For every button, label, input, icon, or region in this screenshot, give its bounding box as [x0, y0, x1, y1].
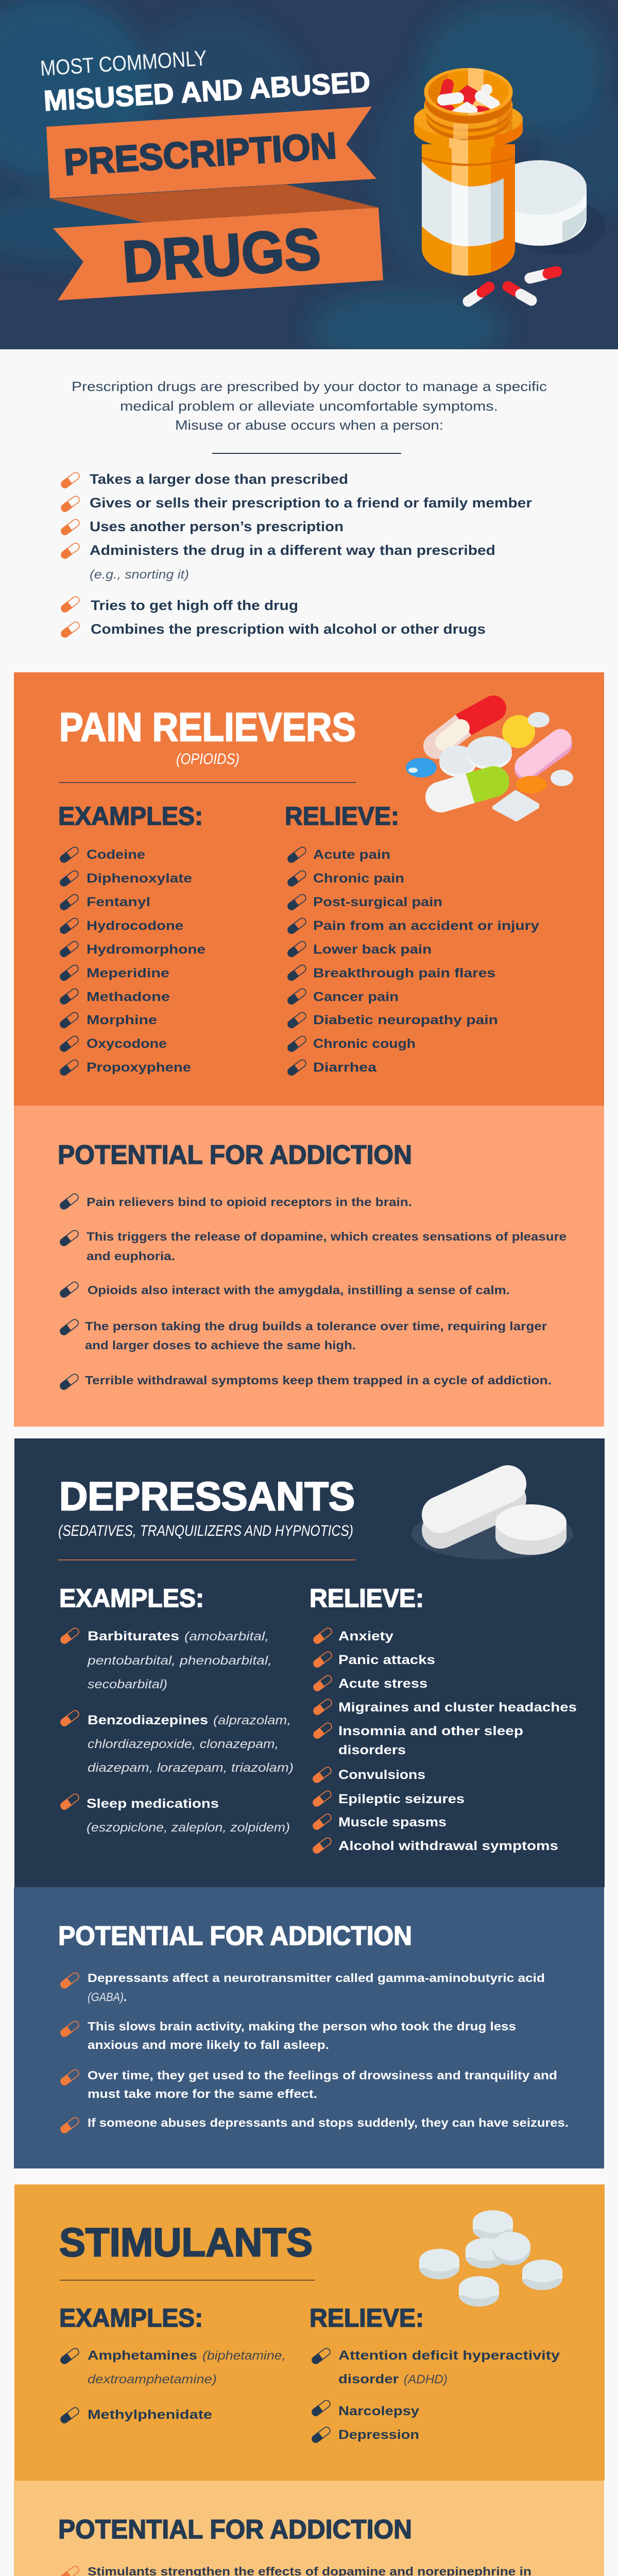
- list item: adhd: disorder: [338, 2372, 399, 2386]
- illustration: white bottle cap: [515, 160, 605, 255]
- heading: examples: EXAMPLES:: [58, 802, 203, 831]
- panel: depressants addiction: [14, 1887, 604, 2168]
- list: misuse behaviours: [59, 471, 533, 639]
- illustration: orange pill bottle: [414, 64, 523, 283]
- list: depressant addiction points: .: [124, 1990, 127, 2004]
- list item: larger dose: Takes a larger dose than prescribed: [90, 471, 348, 487]
- list: opioid addiction points: Opioids also interact with the amygdala, instilling a sense of calm.: [88, 1283, 510, 1297]
- list item: amphetamines: (biphetamine,: [202, 2349, 286, 2363]
- subheading: sedatives: (SEDATIVES, TRANQUILIZERS AND HYPNOTICS): [58, 1522, 353, 1539]
- pills inside the bottle: [441, 84, 494, 116]
- list: depressant addiction points: must take more for the same effect.: [88, 2087, 317, 2100]
- illustration: round tablets: [419, 2210, 562, 2307]
- list item: barbiturates: (amobarbital,: [184, 1630, 269, 1643]
- list: opioid uses: Breakthrough pain flares: [313, 966, 495, 980]
- list: depressant addiction points: This slows brain activity, making the person who took the drug less: [88, 2020, 516, 2033]
- list: opioid examples: Methadone: [87, 990, 170, 1004]
- list item: barbiturates: Barbiturates: [88, 1629, 179, 1643]
- list: opioid examples: Hydromorphone: [87, 942, 205, 957]
- illustration: white tablets: [411, 1484, 573, 1560]
- illustration: assorted pills: [406, 708, 573, 822]
- intro paragraph: [72, 379, 547, 433]
- list: opioid addiction points: and euphoria.: [87, 1249, 175, 1263]
- list: depressant addiction points: (GABA): [88, 1990, 124, 2004]
- list: stimulant examples: [59, 2347, 286, 2425]
- list item: adhd: Attention deficit hyperactivity: [338, 2348, 560, 2363]
- list: opioid examples: Morphine: [87, 1013, 157, 1027]
- list item: sleep medications: Sleep medications: [87, 1797, 219, 1811]
- list: opioid uses: Chronic cough: [313, 1037, 416, 1051]
- list item: administers differently: Administers the drug in a different way than prescribed: [90, 543, 495, 558]
- list: opioid addiction points: Pain relievers bind to opioid receptors in the brain.: [87, 1195, 412, 1209]
- list: opioid uses: Diarrhea: [313, 1060, 377, 1075]
- panel: pain relievers addiction: [14, 1106, 604, 1427]
- title word: prescription: PRESCRIPTION: [63, 125, 338, 183]
- list: depressant uses: Epileptic seizures: [338, 1792, 465, 1806]
- intro paragraph: Prescription drugs are prescribed by your doctor to manage a specific: [72, 379, 547, 394]
- intro paragraph: medical problem or alleviate uncomfortable symptoms.: [120, 398, 498, 414]
- list: depressant uses: Acute stress: [338, 1676, 427, 1691]
- list: opioid uses: Diabetic neuropathy pain: [313, 1013, 498, 1027]
- heading: potential for addiction: POTENTIAL FOR ADDICTION: [58, 2515, 412, 2545]
- list: depressant addiction points: [59, 1971, 569, 2135]
- heading: depressants: DEPRESSANTS: [59, 1473, 355, 1519]
- list: depressant uses: Insomnia and other sleep: [338, 1724, 523, 1738]
- list item: methylphenidate: Methylphenidate: [88, 2408, 212, 2422]
- heading: examples: EXAMPLES:: [59, 1584, 204, 1613]
- list item: adhd: [310, 2347, 560, 2386]
- list: depressant examples: [59, 1626, 294, 1835]
- list item: administers differently: (e.g., snorting it): [90, 568, 189, 582]
- list: opioid uses: Lower back pain: [313, 942, 432, 957]
- panel: pain relievers: [14, 672, 604, 1106]
- list item: barbiturates: [59, 1626, 272, 1691]
- panel: depressants: [14, 1438, 605, 1887]
- hero background: [0, 0, 618, 371]
- list: depressant uses: Alcohol withdrawal symptoms: [338, 1839, 558, 1853]
- list: opioid uses: Acute pain: [313, 848, 390, 862]
- list item: amphetamines: dextroamphetamine): [88, 2372, 217, 2386]
- list: depressant uses: [311, 1626, 577, 1855]
- panel: stimulants: [14, 2184, 605, 2481]
- list: opioid examples: Codeine: [87, 848, 145, 862]
- list: stimulant uses: [310, 2347, 560, 2445]
- list item: barbiturates: secobarbital): [88, 1677, 167, 1691]
- list item: tries to get high: Tries to get high off the drug: [91, 598, 298, 613]
- list: opioid examples: Meperidine: [87, 966, 169, 980]
- list: depressant addiction points: Over time, they get used to the feelings of drowsiness and tranquility and: [88, 2069, 557, 2082]
- list: opioid addiction points: and larger doses to achieve the same high.: [85, 1338, 356, 1352]
- list item: larger dose: [59, 471, 348, 490]
- list item: another person's prescription: Uses another person’s prescription: [90, 519, 344, 534]
- list: opioid uses: Pain from an accident or injury: [313, 919, 539, 933]
- list item: narcolepsy: Narcolepsy: [338, 2404, 419, 2418]
- list: depressant addiction points: If someone abuses depressants and stops suddenly, they can have seizures.: [88, 2116, 569, 2129]
- list item: depression: [310, 2426, 419, 2445]
- list: opioid examples: Fentanyl: [87, 895, 150, 909]
- list item: depression: Depression: [338, 2428, 419, 2442]
- list item: tries to get high: [59, 595, 298, 614]
- title line: most commonly: MOST COMMONLY: [40, 46, 208, 80]
- list item: sleep medications: [59, 1792, 290, 1835]
- list item: sleep medications: (eszopiclone, zaleplon, zolpidem): [87, 1821, 290, 1835]
- list: depressant uses: Panic attacks: [338, 1653, 435, 1667]
- list item: gives or sells: Gives or sells their prescription to a friend or family member: [90, 495, 533, 511]
- heading: relieve: RELIEVE:: [310, 1584, 424, 1613]
- ribbon: prescription drugs banner: [46, 107, 383, 300]
- list item: combines with alcohol: Combines the prescription with alcohol or other drugs: [91, 621, 486, 637]
- panel: hero header: [0, 0, 618, 371]
- bottle opening: [424, 68, 513, 116]
- bottle neck threads: [424, 98, 513, 140]
- bottle collar: [414, 108, 523, 149]
- list: depressant addiction points: anxious and more likely to fall asleep.: [88, 2038, 329, 2052]
- list: opioid uses: Chronic pain: [313, 871, 404, 886]
- list: depressant uses: Anxiety: [338, 1629, 393, 1643]
- list: depressant uses: Convulsions: [338, 1768, 425, 1782]
- list item: benzodiazepines: [59, 1709, 294, 1775]
- list: depressant uses: Migraines and cluster headaches: [338, 1700, 577, 1715]
- list: opioid examples: [58, 845, 205, 1077]
- list item: benzodiazepines: chlordiazepoxide, clonazepam,: [88, 1737, 279, 1751]
- list item: amphetamines: Amphetamines: [88, 2348, 197, 2363]
- list item: benzodiazepines: Benzodiazepines: [88, 1713, 208, 1727]
- list: depressant uses: Muscle spasms: [338, 1815, 447, 1829]
- heading: potential for addiction: POTENTIAL FOR ADDICTION: [58, 1140, 412, 1170]
- list: opioid addiction points: This triggers the release of dopamine, which creates sensations of pleasure: [87, 1230, 566, 1243]
- list item: barbiturates: pentobarbital, phenobarbital,: [87, 1654, 272, 1668]
- list item: benzodiazepines: (alprazolam,: [213, 1714, 291, 1727]
- list: opioid examples: Diphenoxylate: [87, 871, 192, 886]
- intro paragraph: Misuse or abuse occurs when a person:: [175, 417, 443, 433]
- list: opioid addiction points: The person taking the drug builds a tolerance over time, requiring larger: [85, 1319, 547, 1333]
- list item: narcolepsy: [310, 2399, 419, 2418]
- list item: combines with alcohol: [59, 620, 486, 639]
- title word: drugs: DRUGS: [121, 216, 323, 295]
- list item: gives or sells: [59, 495, 533, 514]
- list item: benzodiazepines: diazepam, lorazepam, triazolam): [88, 1761, 294, 1775]
- heading: examples: EXAMPLES:: [59, 2303, 203, 2332]
- subheading: opioids: (OPIOIDS): [176, 751, 239, 768]
- heading: stimulants: STIMULANTS: [59, 2219, 313, 2265]
- list: opioid examples: Oxycodone: [87, 1037, 167, 1051]
- title line: misused and abused: MISUSED AND ABUSED: [43, 65, 371, 117]
- list item: amphetamines: [59, 2347, 286, 2386]
- list item: administers differently: [59, 541, 495, 582]
- list item: methylphenidate: [59, 2406, 212, 2425]
- panel: stimulants addiction: [14, 2481, 604, 2576]
- list: opioid addiction points: Terrible withdrawal symptoms keep them trapped in a cycle of addiction.: [85, 1374, 552, 1387]
- list: opioid examples: Propoxyphene: [87, 1060, 191, 1075]
- list: opioid uses: Cancer pain: [313, 990, 399, 1004]
- illustration: loose capsules: [468, 272, 557, 301]
- list item: adhd: (ADHD): [404, 2372, 448, 2386]
- heading: relieve: RELIEVE:: [310, 2303, 424, 2332]
- list: opioid examples: Hydrocodone: [87, 919, 183, 933]
- list: depressant addiction points: Depressants affect a neurotransmitter called gamma-aminobutyric acid: [88, 1971, 545, 1985]
- list: depressant uses: disorders: [338, 1743, 406, 1757]
- list: opioid addiction points: [58, 1192, 566, 1392]
- list: opioid uses: [286, 845, 539, 1077]
- heading: pain relievers: PAIN RELIEVERS: [59, 704, 356, 750]
- list item: another person's prescription: [59, 518, 344, 537]
- bottle label: [422, 162, 504, 246]
- heading: relieve: RELIEVE:: [285, 802, 399, 831]
- list: opioid uses: Post-surgical pain: [313, 895, 442, 909]
- heading: potential for addiction: POTENTIAL FOR ADDICTION: [58, 1921, 412, 1951]
